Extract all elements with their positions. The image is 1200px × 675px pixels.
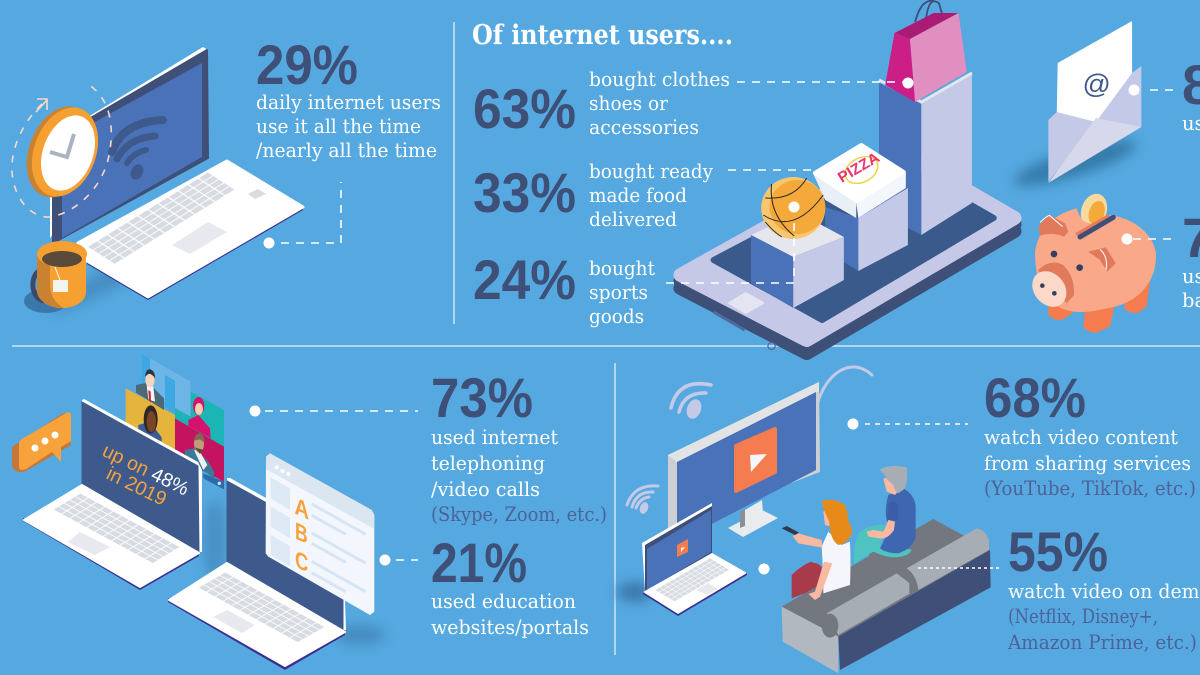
connector: education [380, 554, 418, 566]
illustration: piggy bank [1025, 190, 1156, 333]
icon: wifi [112, 120, 163, 182]
stat: 33%: bought ready [589, 160, 713, 183]
stat: 29%: /nearly all the time [256, 139, 437, 162]
icon: mug [24, 241, 87, 313]
illustration: tv and laptop [617, 367, 872, 616]
sofa seat and sides [782, 519, 990, 637]
stat: 68%: 68% [984, 366, 1086, 429]
icon: chat bubble [12, 412, 71, 472]
stat: 55% [1007, 520, 1200, 654]
illustration: couple on sofa [782, 466, 991, 673]
stat: 68%: from sharing services [984, 452, 1191, 475]
stat: 33%: made food [589, 184, 687, 207]
stat: 68% [984, 366, 1196, 500]
illustration: envelope [1010, 21, 1141, 195]
connectors: purchases [663, 78, 914, 283]
play tile [736, 429, 775, 491]
stat: 55%: 55% [1008, 520, 1108, 583]
icon: pizza box: PIZZA [835, 149, 883, 186]
web window: C [295, 546, 308, 578]
stat: 24%: 24% [473, 248, 576, 311]
short bar [751, 213, 844, 257]
stat: 24%: goods [589, 305, 644, 328]
stat: 73%: telephoning [431, 452, 545, 475]
cushions [827, 573, 910, 635]
illustration: laptop with up on 48% text [23, 399, 227, 590]
connector: email [1128, 84, 1178, 96]
web window [266, 453, 374, 615]
coin [1077, 190, 1111, 231]
woman [782, 500, 852, 600]
illustration: laptop with clock and mug [12, 47, 303, 323]
stat: 73% [431, 366, 607, 526]
stat: 29% [256, 33, 441, 162]
stat: 73%: 73% [431, 366, 533, 429]
snout [1038, 263, 1074, 303]
screen text: up on 48% [99, 440, 192, 500]
stat: 21%: websites/portals [431, 616, 589, 639]
illustration: video call tiles [126, 353, 224, 489]
stat: 29%: 29% [256, 33, 358, 96]
stat: 73%: /video calls [431, 478, 540, 501]
web window: B [295, 517, 308, 550]
stat: 21% [431, 531, 589, 639]
ears [1038, 215, 1068, 237]
stat: 55%: (Netflix, Disney+, [1008, 605, 1158, 628]
small laptop [617, 582, 653, 602]
stat: 63%: shoes or [589, 92, 669, 115]
eyes [1051, 251, 1057, 257]
icon: shopping bag [885, 1, 967, 102]
stat: banking (cropped) [1182, 206, 1200, 312]
heading: of internet users: Of internet users.... [472, 20, 733, 51]
stat: 21%: 21% [431, 531, 527, 594]
illustration: envelope: @ [1082, 68, 1111, 99]
screen text: in 2019 [103, 463, 170, 511]
stat: 21%: used education [431, 590, 576, 613]
person: woman in hijab [188, 397, 211, 438]
illustration: laptop with education window [168, 453, 385, 670]
stat: 63%: bought clothes [589, 68, 730, 91]
stat: 63% [473, 68, 730, 140]
web window: A [294, 492, 309, 526]
connector: video sharing [848, 418, 968, 430]
person: man in suit [136, 369, 164, 410]
connector: banking [1122, 234, 1178, 244]
person: woman with dark hair [138, 405, 162, 442]
stat: 29%: daily internet users [256, 91, 441, 114]
stat: 24%: bought [589, 257, 655, 280]
stat: 33% [473, 160, 713, 231]
stat: 24% [473, 248, 655, 328]
stat: 68%: watch video content [984, 426, 1178, 449]
stat: 33%: 33% [473, 161, 576, 224]
icon: clock [12, 84, 111, 217]
icon: basketball [761, 177, 825, 239]
connector: video calls [250, 406, 418, 416]
icon: pizza box [813, 145, 906, 218]
tall bar [879, 83, 921, 235]
stat: 24%: sports [589, 281, 648, 304]
stat: 63%: accessories [589, 116, 699, 139]
stat: 33%: delivered [589, 208, 677, 231]
keyboard [87, 172, 235, 264]
stat: 63%: 63% [473, 77, 576, 140]
illustration: smartphone with bars [681, 1, 1014, 353]
connectors: video on demand [758, 564, 1002, 574]
stat: 73%: used internet [431, 426, 558, 449]
man [854, 466, 916, 563]
connector: laptop to stat [264, 182, 341, 248]
person: bearded man [185, 433, 214, 478]
middle bar [825, 207, 858, 271]
stat: 29%: use it all the time [256, 115, 421, 138]
stat: 73%: (Skype, Zoom, etc.) [431, 503, 607, 526]
